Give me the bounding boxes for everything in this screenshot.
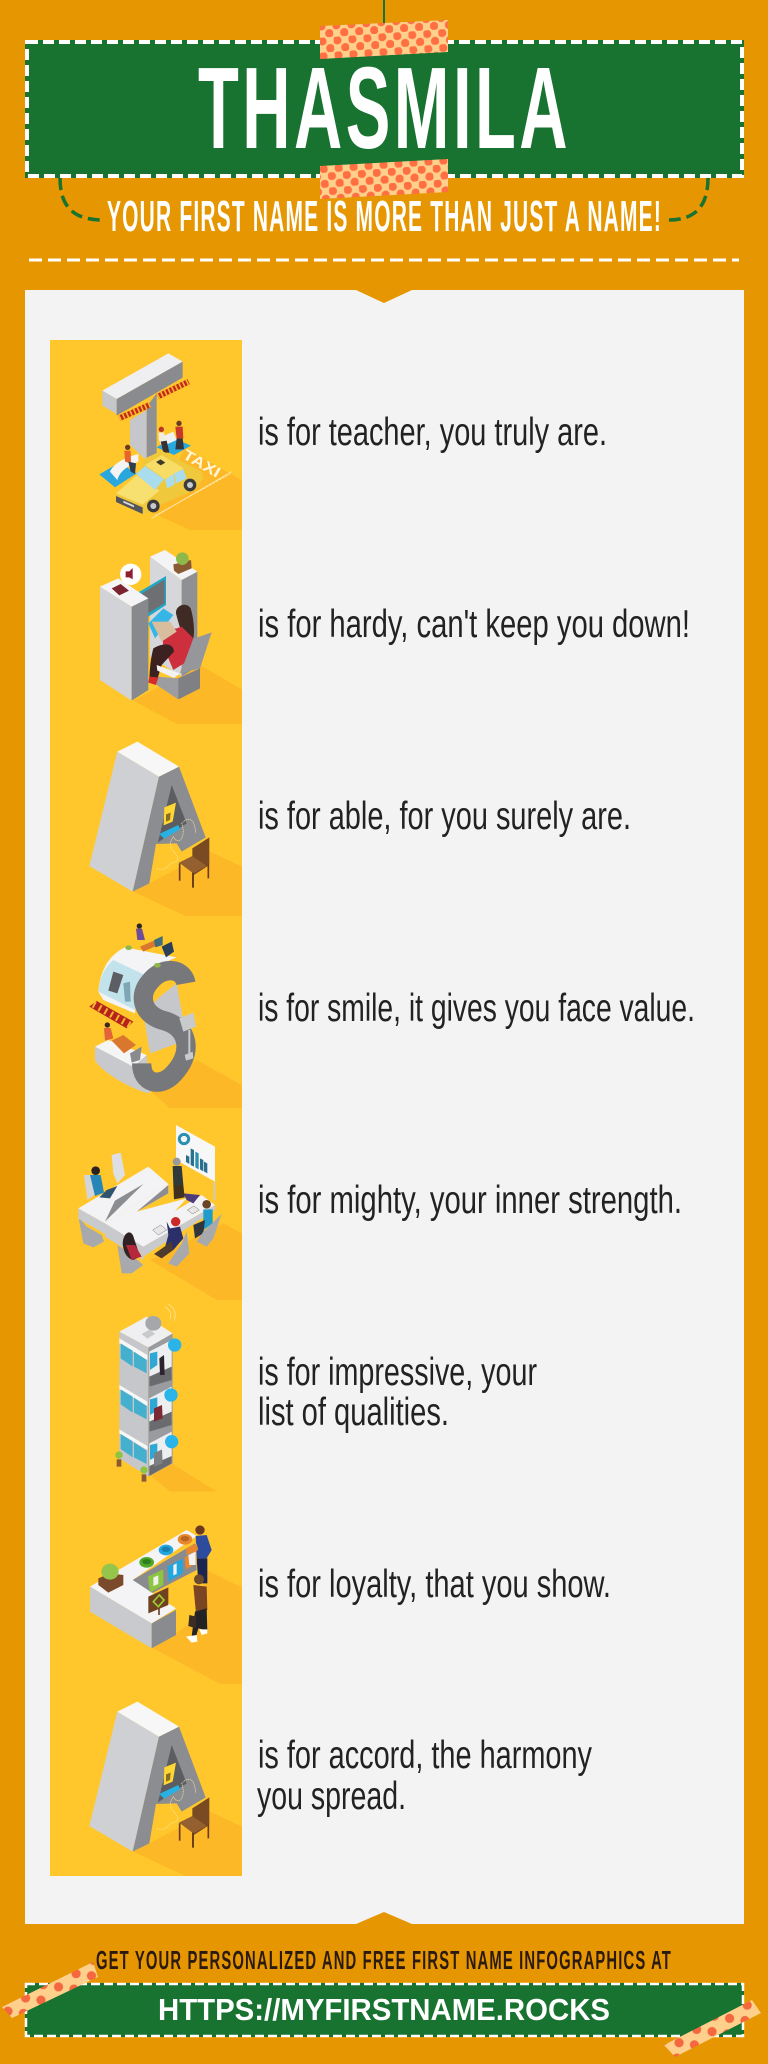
text: line A: is for able, for you surely are.	[258, 795, 631, 838]
text: line A second: you spread.	[257, 1775, 406, 1818]
taxi label: TAXI	[180, 447, 223, 481]
text: line L: is for loyalty, that you show.	[258, 1563, 611, 1606]
icon: letter H with woman at desk	[100, 550, 242, 724]
text: line A second: is for accord, the harmony	[258, 1734, 592, 1777]
dashed divider	[29, 258, 739, 262]
text: line I: list of qualities.	[258, 1391, 449, 1434]
footer URL banner	[25, 1983, 744, 2037]
icon: letter M with meeting table	[78, 1125, 242, 1300]
white content panel	[25, 290, 744, 1924]
icon: letter S with desks	[89, 923, 242, 1108]
text: line T: is for teacher, you truly are.	[258, 411, 607, 454]
text: line I	[258, 1351, 537, 1434]
footer left tape	[2, 1962, 98, 2018]
header banner	[25, 40, 744, 178]
hanging string	[383, 0, 385, 24]
bottom tape	[320, 159, 448, 199]
icon: letter I as tower	[115, 1304, 217, 1492]
text: line I: is for impressive, your	[258, 1351, 537, 1394]
right curved connector	[669, 178, 708, 220]
URL text: HTTPS://MYFIRSTNAME.ROCKS	[158, 1993, 610, 2027]
left curved connector	[60, 178, 103, 220]
footer right tape	[664, 2000, 761, 2057]
icon: letter A with chair (repeat)	[89, 1702, 242, 1877]
icon: letter L with recycling bins	[90, 1525, 242, 1684]
top tape	[320, 20, 448, 59]
icon: letter A with chair	[89, 742, 242, 917]
text: line A second	[257, 1734, 592, 1818]
yellow illustration column	[50, 340, 242, 1876]
icon: letter T with taxi	[99, 353, 242, 530]
